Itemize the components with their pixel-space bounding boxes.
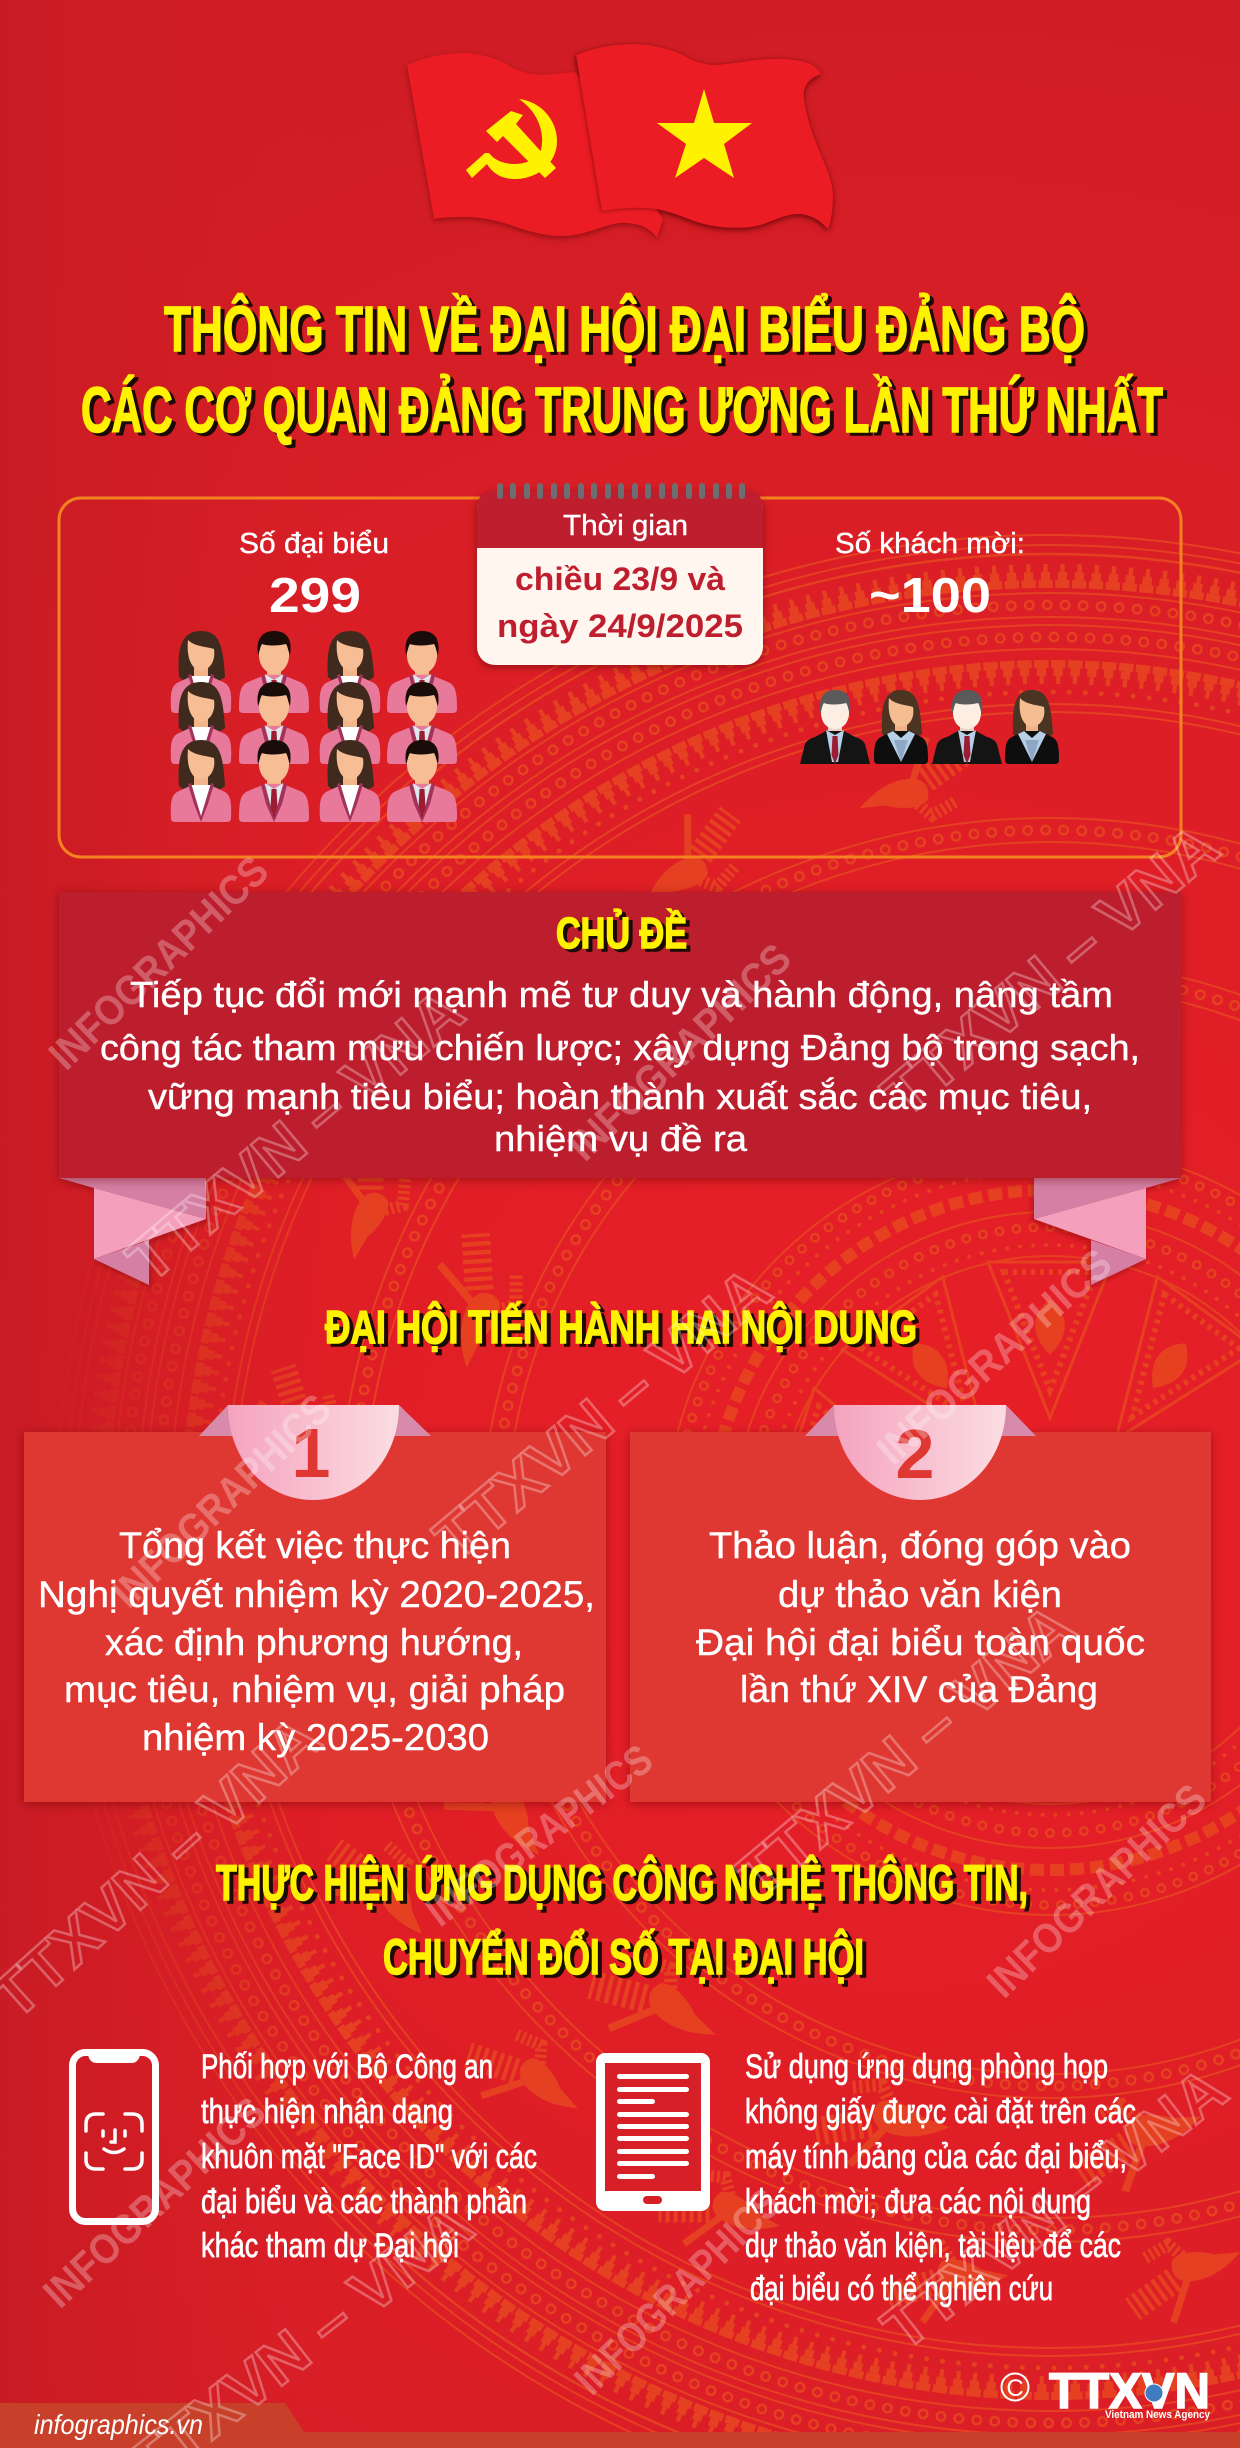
tab 2: 2 — [896, 1415, 934, 1493]
calendar: time — [477, 483, 763, 665]
icon: delegates group — [171, 631, 457, 822]
banner text: Tiếp tục đổi mới mạnh mẽ tư duy và hành động, nâng tầm — [130, 974, 1113, 1015]
text: face id — [201, 2048, 537, 2265]
calendar date — [497, 561, 743, 644]
icon: phone face id — [72, 2052, 156, 2222]
tab 1: 1 — [292, 1414, 330, 1492]
content 2 text: lần thứ XIV của Đảng — [740, 1669, 1098, 1710]
calendar heading: Thời gian — [563, 510, 688, 542]
text: paperless: khách mời; đưa các nội dung — [745, 2183, 1091, 2221]
bronze drum pattern — [55, 535, 1240, 2448]
watermarks: TTXVN – VNA — [870, 2054, 1240, 2364]
text: paperless: đại biểu có thể nghiên cứu — [750, 2270, 1053, 2308]
title — [81, 292, 1163, 446]
content 1 text — [38, 1525, 595, 1758]
footer tab: infographics.vn — [34, 2409, 203, 2440]
national flag — [576, 44, 833, 229]
text: paperless: dự thảo văn kiện, tài liệu để các — [745, 2227, 1121, 2265]
logo wordmark: TTXVN — [1049, 2363, 1210, 2419]
left edge shade — [0, 0, 340, 2448]
banner heading: CHỦ ĐỀ — [556, 907, 687, 958]
banner body — [59, 892, 1181, 1178]
watermarks: INFOGRAPHICS — [978, 1775, 1215, 2006]
watermarks — [0, 811, 1240, 2448]
banner text — [100, 974, 1140, 1159]
text: face id: đại biểu và các thành phần — [201, 2183, 527, 2221]
calendar date: chiều 23/9 và — [515, 561, 725, 597]
panel: theme banner — [59, 892, 1181, 1285]
text: face id: thực hiện nhận dạng — [201, 2093, 453, 2131]
logo tagline: Vietnam News Agency — [1105, 2409, 1211, 2421]
footer tab — [0, 2403, 304, 2448]
banner text: công tác tham mưu chiến lược; xây dựng Đảng bộ trong sạch, — [100, 1027, 1140, 1068]
content 2 text: Đại hội đại biểu toàn quốc — [696, 1622, 1145, 1663]
content 1 text: Nghị quyết nhiệm kỳ 2020-2025, — [38, 1574, 595, 1615]
ribbon left — [59, 1178, 206, 1285]
content 1 text: xác định phương hướng, — [105, 1622, 523, 1663]
text: face id: khác tham dự Đại hội — [201, 2227, 459, 2265]
text: paperless: Sử dụng ứng dụng phòng họp — [745, 2048, 1108, 2086]
heading: digital transformation — [216, 1854, 1028, 1985]
content 2 text: dự thảo văn kiện — [778, 1574, 1062, 1615]
guests count: ~100 — [869, 569, 991, 623]
text: paperless: máy tính bảng của các đại biểu, — [745, 2138, 1127, 2176]
content 2 text: Thảo luận, đóng góp vào — [709, 1525, 1131, 1566]
delegates block — [171, 528, 457, 822]
copyright mark: C — [1006, 2375, 1024, 2402]
content 1 text: Tổng kết việc thực hiện — [119, 1525, 511, 1566]
banner text: vững mạnh tiêu biểu; hoàn thành xuất sắc các mục tiêu, — [148, 1076, 1092, 1117]
panel: info frame — [59, 498, 1181, 857]
watermarks: INFOGRAPHICS — [565, 2179, 789, 2403]
watermarks: TTXVN – VNA — [115, 976, 477, 1296]
text: face id: khuôn mặt "Face ID" với các — [201, 2138, 537, 2176]
logo: TTXVN — [1002, 2363, 1211, 2421]
content 1 text: nhiệm kỳ 2025-2030 — [142, 1717, 489, 1758]
icon: tablet — [596, 2053, 710, 2211]
ribbon right — [1034, 1178, 1181, 1285]
watermarks: INFOGRAPHICS — [559, 934, 800, 1169]
text: paperless — [745, 2048, 1136, 2308]
calendar date: ngày 24/9/2025 — [497, 608, 743, 644]
watermarks: INFOGRAPHICS — [103, 1385, 340, 1616]
watermarks: TTXVN – VNA — [725, 1591, 1087, 1911]
party flag — [407, 53, 663, 238]
watermarks: INFOGRAPHICS — [868, 1239, 1120, 1474]
panel: content 1 — [24, 1405, 606, 1802]
tab 2 — [805, 1405, 1036, 1500]
watermarks: INFOGRAPHICS — [417, 1735, 661, 1935]
guests block — [800, 528, 1059, 764]
heading: digital transformation: CHUYỂN ĐỔI SỐ TẠI ĐẠI HỘI — [383, 1928, 864, 1985]
watermarks: TTXVN – VNA — [870, 811, 1232, 1131]
guests label: Số khách mời: — [835, 528, 1025, 560]
flags — [407, 44, 833, 238]
tab 1 — [199, 1405, 431, 1500]
footer band — [0, 2432, 1240, 2448]
text: face id: Phối hợp với Bộ Công an — [201, 2048, 493, 2086]
banner text: nhiệm vụ đề ra — [494, 1118, 748, 1159]
icon: guests group — [800, 690, 1059, 764]
icon: globe — [1145, 2384, 1163, 2402]
text: paperless: không giấy được cài đặt trên các — [745, 2093, 1136, 2131]
watermarks: INFOGRAPHICS — [40, 847, 277, 1078]
watermarks: INFOGRAPHICS — [34, 2088, 275, 2317]
copyright mark — [1002, 2374, 1028, 2402]
panel: content 2 — [630, 1405, 1211, 1802]
heading: two contents: ĐẠI HỘI TIẾN HÀNH HAI NỘI DUNG — [325, 1301, 917, 1353]
delegates label: Số đại biểu — [239, 528, 389, 560]
content 2 text — [696, 1525, 1145, 1710]
watermarks: TTXVN – VNA — [422, 1254, 784, 1574]
content 1 text: mục tiêu, nhiệm vụ, giải pháp — [64, 1669, 565, 1710]
delegates count: 299 — [269, 569, 361, 623]
